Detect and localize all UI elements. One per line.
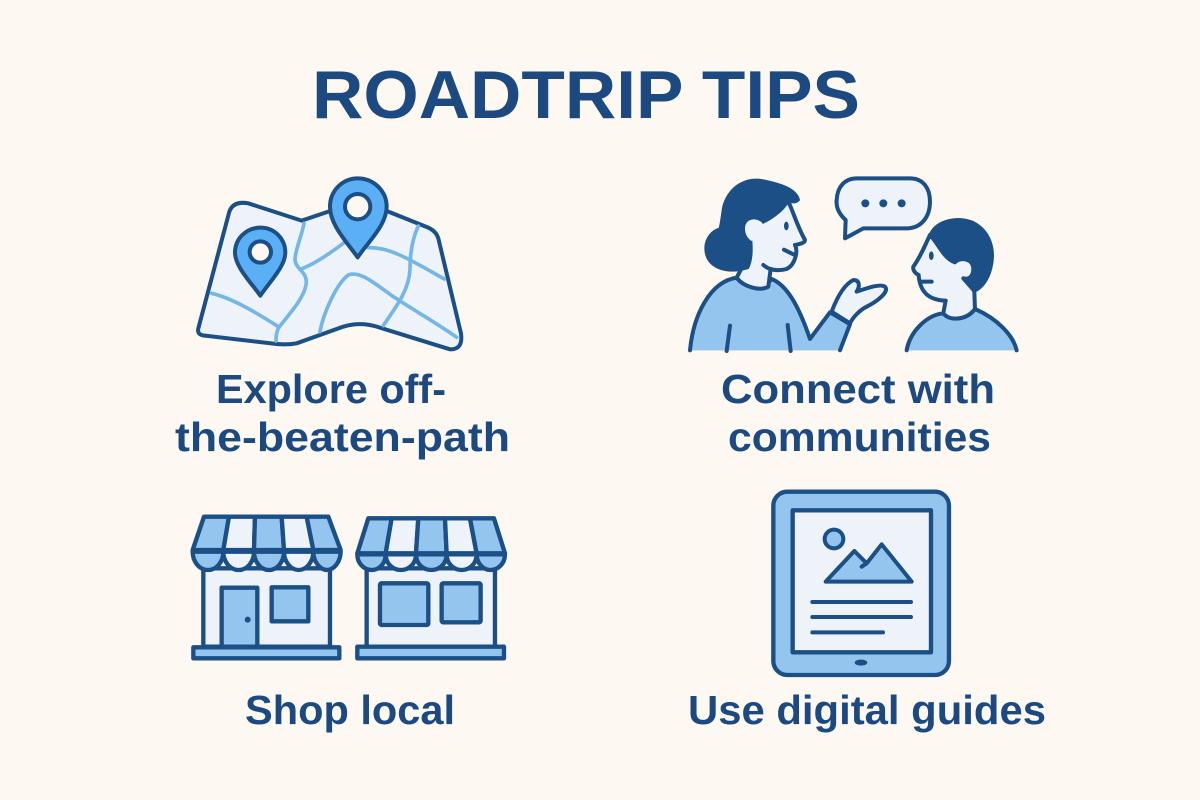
icon: speech bubble	[837, 178, 930, 238]
label: shop local: Shop local	[245, 687, 455, 733]
label: use digital guides: Use digital guides	[688, 687, 1046, 733]
shop one	[193, 517, 341, 658]
icon: folded map with pins	[198, 178, 461, 349]
label: explore off-the-beaten-path: Explore off-	[216, 366, 446, 412]
label: connect with communities: Connect with	[721, 366, 995, 412]
label: explore off-the-beaten-path: the-beaten-path	[175, 414, 510, 460]
label: explore off-the-beaten-path	[175, 366, 510, 460]
label: connect with communities: communities	[728, 414, 991, 460]
shop two	[357, 518, 505, 658]
icon: two local shops	[193, 517, 505, 658]
icon: tablet with digital guide	[773, 492, 949, 675]
label: connect with communities	[721, 366, 995, 460]
icon: two people talking	[690, 178, 1017, 351]
title: ROADTRIP TIPS	[312, 57, 860, 133]
